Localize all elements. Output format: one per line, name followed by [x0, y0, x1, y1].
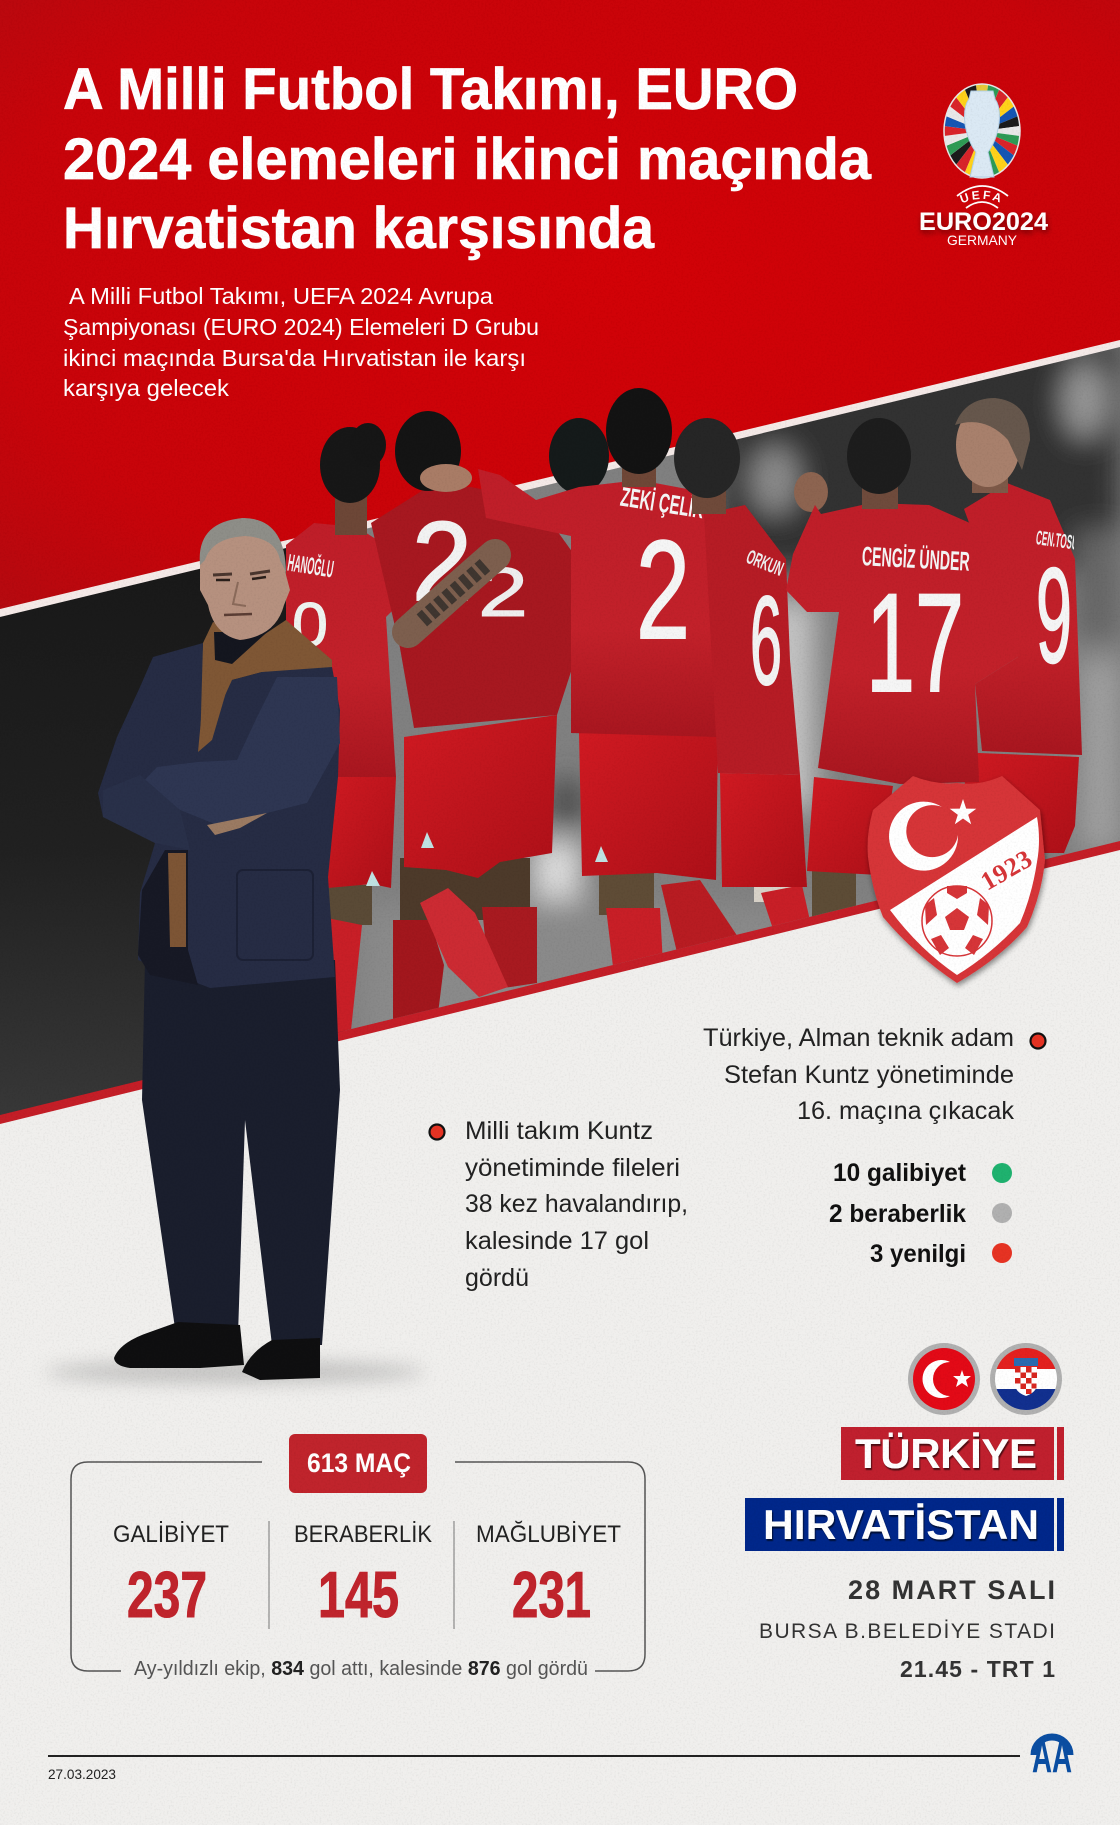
icon: Turkey flag	[908, 1343, 980, 1415]
callout text: yönetiminde fileleri	[465, 1154, 680, 1182]
player: number 2 with tattooed arm: 2	[412, 499, 472, 624]
bullet	[430, 1124, 444, 1140]
coach trousers	[142, 960, 340, 1345]
photo: national team players	[286, 388, 1085, 1040]
title: Hırvatistan karşısında	[63, 196, 655, 261]
bullet	[1030, 1034, 1046, 1048]
stat: losses: MAĞLUBİYET	[476, 1521, 621, 1548]
match details: 21.45 - TRT 1	[900, 1656, 1055, 1682]
coach scarf	[197, 620, 332, 750]
stat: losses	[476, 1521, 621, 1631]
coach open jacket lining	[138, 850, 198, 985]
callout text: Stefan Kuntz yönetiminde	[724, 1061, 1014, 1089]
player: Zeki Çelik: ZEKİ ÇELİK	[618, 482, 706, 524]
shield football	[922, 886, 992, 956]
player: left behind coach	[286, 423, 396, 1032]
legend labels: 2 beraberlik	[829, 1200, 966, 1228]
legend labels	[829, 1159, 967, 1268]
title	[63, 57, 872, 261]
logo EURO2024 wordmark: EURO2024	[919, 208, 1048, 236]
logo colored oval	[944, 84, 1020, 175]
player: left behind coach: 0	[292, 591, 328, 660]
player: Cengiz Ünder: CENGİZ ÜNDER	[861, 541, 971, 577]
goals footnote: Ay-yıldızlı ekip, 834 gol attı, kalesinde 876 gol gördü	[134, 1658, 588, 1680]
callout text: 38 kez havalandırıp,	[465, 1190, 688, 1218]
footer rule	[48, 1755, 1020, 1757]
callout text: 16. maçına çıkacak	[797, 1097, 1014, 1125]
match details: BURSA B.BELEDİYE STADI	[759, 1620, 1055, 1643]
panel: all-time record	[71, 1434, 645, 1680]
callout text: Milli takım Kuntz	[465, 1117, 653, 1145]
footer date: 27.03.2023	[48, 1766, 116, 1782]
label: Türkiye: TÜRKİYE	[855, 1430, 1037, 1477]
subtitle text block	[63, 283, 539, 401]
player: Cengiz Ünder	[786, 418, 1018, 928]
badge: 613 matches: 613 MAÇ	[307, 1448, 411, 1478]
panel frame	[71, 1462, 645, 1671]
player: Orkun	[674, 418, 811, 935]
shield outline	[868, 776, 1045, 983]
legend dots	[992, 1163, 1012, 1263]
callout text: Türkiye, Alman teknik adam	[703, 1024, 1014, 1052]
icon: Turkish Football Federation shield	[868, 776, 1045, 983]
logo trophy	[964, 91, 1000, 177]
photo: head coach Stefan Kuntz	[45, 518, 425, 1383]
icon: Anadolu Agency logo: AA	[1032, 1730, 1072, 1782]
shield year: 1923	[976, 844, 1037, 896]
stat: draws: 145	[318, 1558, 399, 1631]
player: number 2 with tattooed arm: 2	[478, 553, 528, 631]
callout text	[703, 1024, 1014, 1125]
icon: Croatia flag	[990, 1343, 1062, 1415]
player: Orkun: 6	[750, 572, 782, 711]
match details	[759, 1575, 1055, 1682]
label: Hırvatistan: HIRVATİSTAN	[763, 1501, 1039, 1548]
panel: red header background	[0, 0, 1120, 612]
icon: EURO 2024 logo	[918, 83, 1052, 248]
callout text	[465, 1117, 688, 1292]
coach ground shadow	[45, 1361, 425, 1383]
match details: 28 MART SALI	[848, 1575, 1055, 1605]
stat: draws: BERABERLİK	[294, 1521, 432, 1548]
logo oval rim	[944, 84, 1020, 178]
panel: stadium photo background	[0, 340, 1120, 1140]
coach turtleneck	[214, 625, 275, 664]
red diagonal stripe	[0, 841, 1120, 1124]
coach lower sleeve	[103, 775, 190, 850]
player: Cengiz Ünder: 17	[866, 564, 964, 721]
player: Cenk Tosun	[955, 398, 1085, 853]
coach hand	[207, 813, 267, 835]
player: left behind coach: HANOĞLU	[286, 549, 336, 583]
white diagonal stripe	[0, 340, 1120, 617]
coach jacket	[98, 643, 340, 988]
callout text: kalesinde 17 gol	[465, 1227, 649, 1255]
player: Orkun: ORKUN	[743, 546, 786, 581]
coach shoes	[114, 1322, 320, 1380]
legend: Kuntz results	[829, 1159, 1012, 1268]
subtitle text block: karşıya gelecek	[63, 375, 230, 401]
coach folded sleeve	[137, 677, 340, 825]
stat: wins: 237	[127, 1558, 207, 1631]
logo GERMANY wordmark: GERMANY	[947, 232, 1018, 248]
subtitle text block: Şampiyonası (EURO 2024) Elemeleri D Grubu	[63, 314, 539, 340]
legend labels: 10 galibiyet	[833, 1159, 967, 1187]
title: 2024 elemeleri ikinci maçında	[63, 127, 872, 192]
shield white lower field	[890, 817, 1039, 975]
coach inner scarf strip	[198, 666, 232, 752]
stat: wins	[113, 1521, 229, 1631]
logo UEFA arc	[957, 186, 1008, 208]
player: Cenk Tosun: 9	[1036, 540, 1072, 691]
shield star	[950, 799, 976, 824]
stat: wins: GALİBİYET	[113, 1521, 229, 1548]
coach pocket	[237, 870, 313, 960]
coach sweater	[168, 853, 186, 947]
callout: Kuntz goals	[430, 1117, 688, 1292]
title: A Milli Futbol Takımı, EURO	[63, 57, 798, 122]
legend labels: 3 yenilgi	[870, 1240, 966, 1268]
player: Zeki Çelik: 2	[636, 511, 690, 668]
coach head	[200, 518, 290, 640]
logo UEFA letters: UEFA	[960, 190, 1000, 202]
player: number 2 with tattooed arm	[371, 411, 609, 1030]
callout text: gördü	[465, 1264, 529, 1292]
stat: losses: 231	[512, 1558, 591, 1631]
stat: draws	[294, 1521, 432, 1631]
shield crescent	[889, 802, 958, 871]
icon: Anadolu Agency logo	[1032, 1730, 1072, 1782]
subtitle text block: A Milli Futbol Takımı, UEFA 2024 Avrupa	[69, 283, 493, 309]
subtitle text block: ikinci maçında Bursa'da Hırvatistan ile karşı	[63, 345, 526, 371]
badge: 613 matches	[289, 1434, 427, 1493]
player: Zeki Çelik	[478, 388, 743, 975]
callout: Kuntz match count	[703, 1024, 1046, 1125]
